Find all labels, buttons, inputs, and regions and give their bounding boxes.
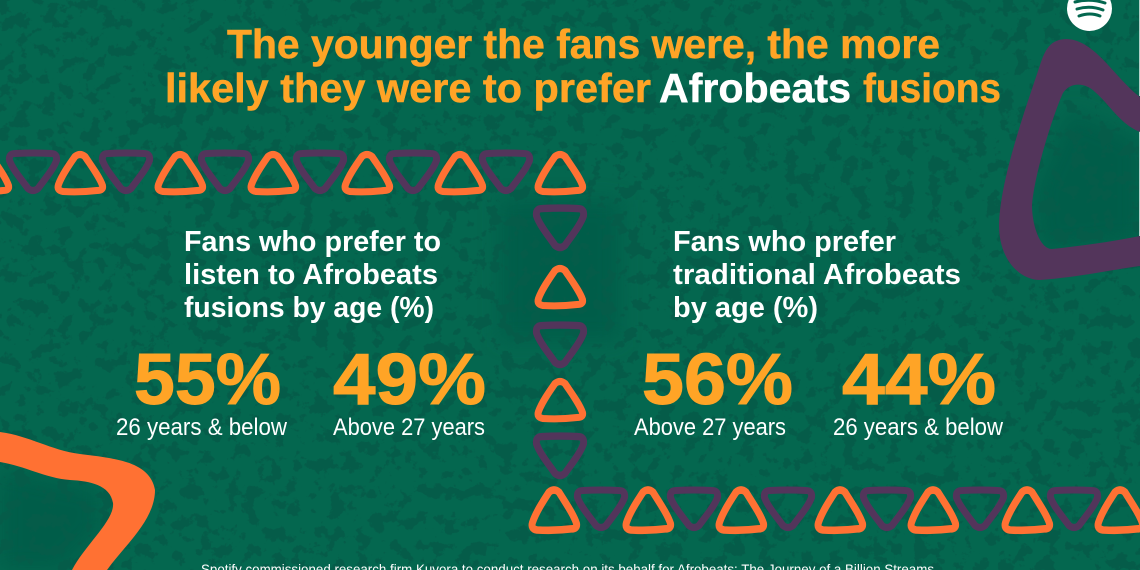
heading: traditional by age: by age (%) [673, 292, 818, 324]
heading: fusions by age: Fans who prefer to [184, 226, 441, 258]
heading: fusions by age: fusions by age (%) [184, 292, 434, 324]
stat: 56% above 27 years: 56% [642, 340, 793, 420]
title: likely they were to prefer [165, 65, 651, 111]
stat: 55% 26 years and below [116, 340, 288, 441]
stat: 49% above 27 years: 49% [333, 340, 486, 420]
heading: fusions by age: listen to Afrobeats [184, 259, 438, 291]
title: Afrobeats [659, 65, 851, 111]
title: fusions [863, 65, 1001, 111]
decorative orange boomerang shape [0, 432, 155, 570]
stat: 55% 26 years and below: 26 years & below [116, 414, 288, 441]
panel: fans who prefer fusions [116, 226, 486, 441]
title: The younger the fans were, the more [227, 21, 940, 67]
heading: traditional by age [673, 226, 961, 324]
panel: fans who prefer traditional [634, 226, 1004, 441]
stat: 44% 26 years and below: 44% [842, 340, 996, 420]
heading: traditional by age: Fans who prefer [673, 226, 896, 258]
stat: 44% 26 years and below [833, 340, 1004, 441]
icon: Spotify logo [1067, 0, 1112, 31]
decorative purple boomerang shape [999, 39, 1140, 280]
triangle border: bottom row [532, 490, 1140, 530]
heading: traditional by age: traditional Afrobeats [673, 259, 961, 291]
triangle border: top row [0, 153, 583, 192]
stat: 55% 26 years and below: 55% [134, 340, 281, 420]
stat: 49% above 27 years: Above 27 years [333, 414, 485, 441]
triangle border: centre column [536, 208, 584, 475]
stat: 44% 26 years and below: 26 years & below [833, 414, 1004, 441]
title [165, 21, 1001, 111]
stat: 56% above 27 years: Above 27 years [634, 414, 786, 441]
heading: fusions by age [184, 226, 441, 324]
